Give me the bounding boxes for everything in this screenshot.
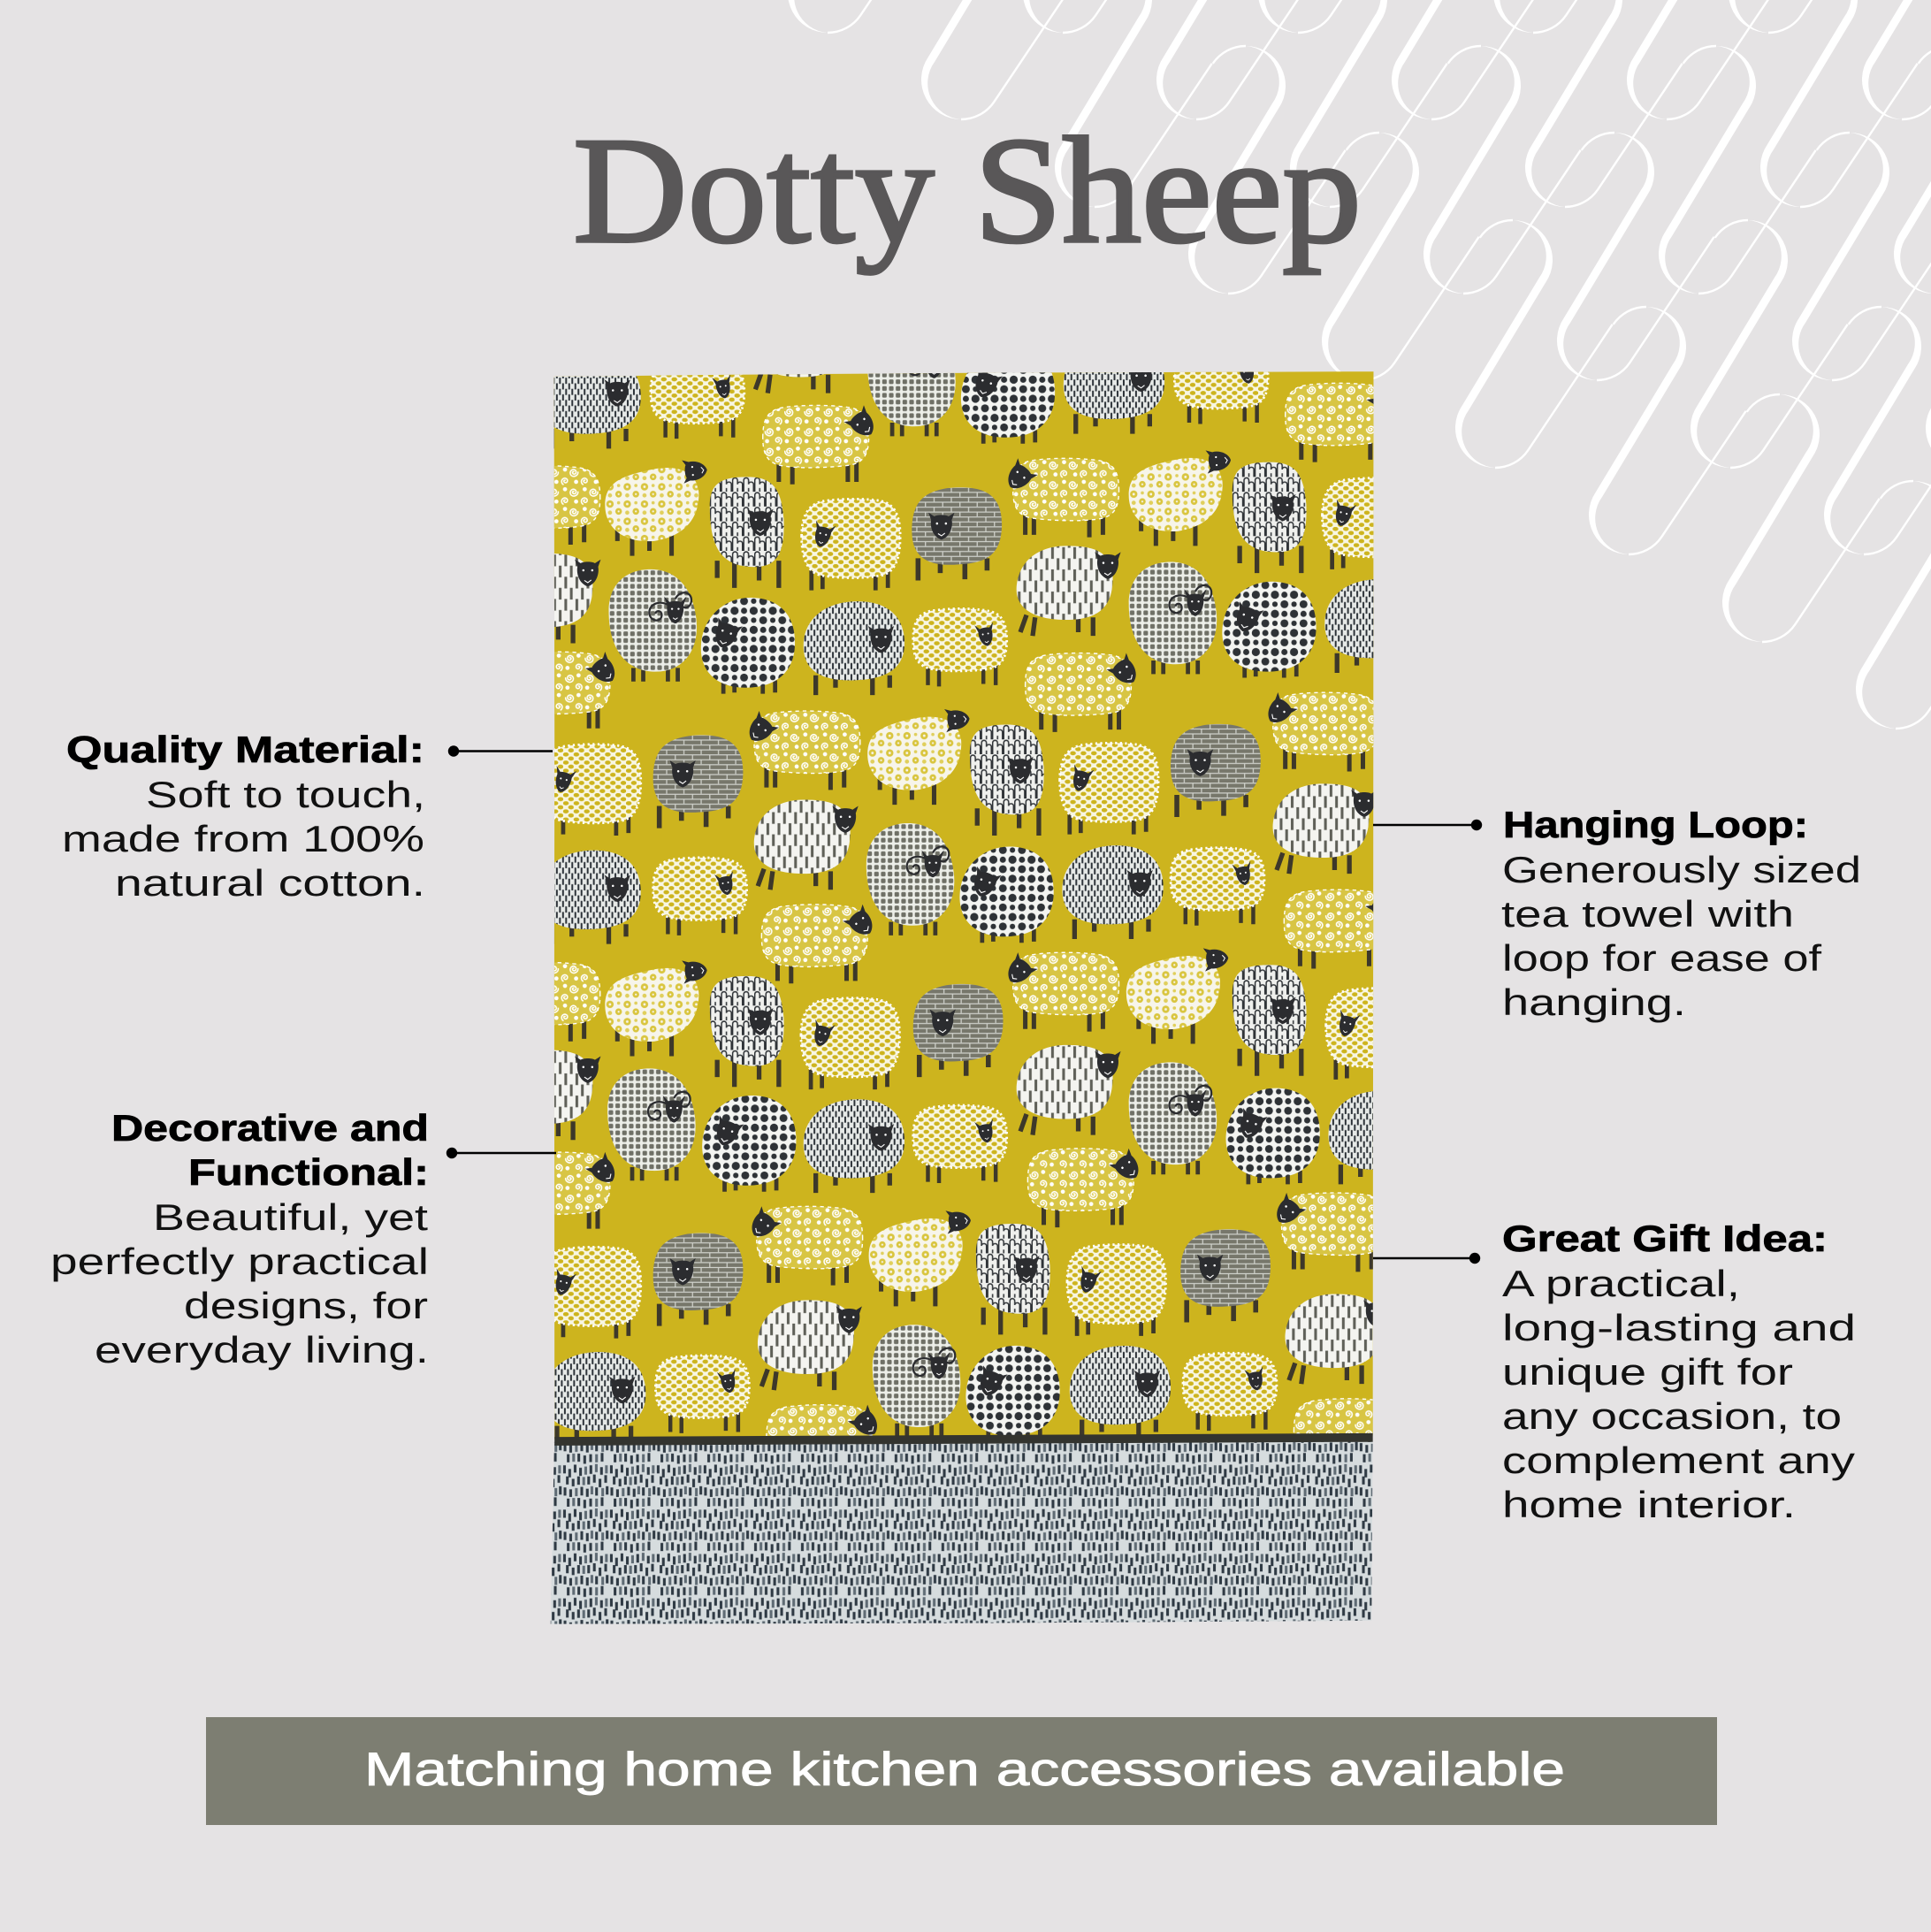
body text: Soft to touch,: [146, 774, 425, 815]
tea towel product image: [550, 371, 1374, 1624]
sheep: stripes: [1273, 783, 1378, 874]
sheep: lattice: [1067, 1245, 1165, 1336]
body text: [50, 1196, 429, 1371]
banner background: [206, 1717, 1717, 1825]
body text: [1502, 1263, 1856, 1525]
sheep: lattice: [653, 858, 747, 935]
callout: decorative and functional: [50, 1107, 556, 1371]
sheep: polka: [701, 598, 795, 694]
body text: designs, for: [184, 1285, 428, 1326]
sheep: lattice: [802, 499, 900, 591]
title: Dotty Sheep: [573, 107, 1362, 275]
sheep: dash: [1070, 1346, 1171, 1439]
sheep: ram mesh: [1129, 1062, 1217, 1174]
body text: [1501, 849, 1861, 1023]
sheep: lattice: [1326, 989, 1424, 1080]
sheep: scallop: [1233, 965, 1307, 1076]
sheep: polka: [966, 1346, 1060, 1442]
sheep: scallop: [710, 976, 784, 1087]
sheep: scallop: [976, 1224, 1050, 1334]
sheep: grey stone: [912, 487, 1002, 580]
sheep: stripes: [1285, 1294, 1389, 1384]
sheep: dash: [553, 376, 641, 449]
towel patterned lower band: [551, 1439, 1373, 1624]
sheep: mesh: [868, 373, 956, 437]
sheep: dash: [539, 851, 641, 944]
body text: natural cotton.: [115, 862, 425, 904]
sheep: ram mesh: [873, 1325, 960, 1437]
sheep: lattice: [542, 1247, 641, 1339]
body text: hanging.: [1502, 981, 1686, 1023]
sheep: swirl: [1026, 653, 1143, 732]
callout: great gift idea: [1373, 1218, 1856, 1525]
sheep: swirl: [1027, 1149, 1146, 1227]
connector line: [1373, 824, 1477, 826]
sheep: swirl: [554, 651, 615, 729]
sheep: stripes: [758, 1300, 862, 1390]
sheep: swirl, cut: [553, 465, 601, 545]
sheep pattern: [553, 371, 1374, 1438]
sheep: scallop: [1233, 462, 1307, 573]
sheep: swirl: [744, 1206, 863, 1286]
sheep: swirl: [1294, 1399, 1412, 1478]
callout: quality material: [62, 729, 553, 904]
sheep: swirl: [1285, 382, 1374, 462]
sheep: white curl: [605, 458, 708, 556]
heading: Great Gift Idea:: [1502, 1218, 1828, 1259]
heading: Quality Material:: [66, 729, 424, 770]
heading: [111, 1107, 429, 1193]
body text: loop for ease of: [1502, 937, 1821, 979]
body text: perfectly practical: [50, 1241, 429, 1282]
sheep: stripes: [1017, 546, 1121, 636]
sheep: lattice: [913, 1105, 1007, 1183]
sheep: ram mesh: [609, 569, 697, 682]
sheep: scallop: [710, 477, 784, 588]
sheep: stripes: [754, 800, 859, 890]
body text: any occasion, to: [1502, 1395, 1842, 1437]
connector line: [452, 1152, 556, 1154]
sheep: lattice: [1172, 371, 1270, 424]
sheep: grey stone: [653, 735, 743, 829]
sheep: dash: [804, 601, 904, 695]
sheep: lattice: [542, 745, 641, 836]
body text: [62, 774, 425, 904]
body text: made from 100%: [62, 818, 424, 859]
decorative white loop pattern: [788, 0, 1931, 729]
sheep: swirl: [761, 905, 880, 983]
sheep: white curl: [867, 707, 971, 805]
sheep: swirl: [763, 405, 882, 485]
sheep: dash: [1324, 579, 1374, 673]
sheep: polka: [960, 372, 1056, 444]
sheep: lattice: [913, 608, 1007, 686]
sheep: white curl: [1129, 448, 1232, 546]
sheep: polka: [702, 1096, 796, 1192]
connector line: [1373, 1257, 1475, 1259]
heading: Functional:: [188, 1151, 429, 1193]
heading: Decorative and: [111, 1107, 429, 1149]
sheep: ram mesh: [866, 823, 954, 935]
body text: Generously sized: [1502, 849, 1861, 890]
sheep: lattice: [801, 998, 899, 1089]
banner: [206, 1717, 1717, 1825]
sheep: white curl: [1126, 946, 1229, 1044]
callout: hanging loop: [1373, 804, 1861, 1023]
sheep: polka: [1226, 1088, 1320, 1184]
sheep: swirl: [1269, 1193, 1387, 1271]
sheep: polka: [1222, 582, 1317, 678]
sheep: stripes: [1017, 1045, 1121, 1135]
sheep: swirl: [504, 1152, 622, 1231]
sheep: white curl: [605, 958, 708, 1056]
body text: unique gift for: [1502, 1351, 1793, 1393]
body text: complement any: [1502, 1439, 1855, 1481]
sheep: dash: [804, 1099, 904, 1193]
sheep: dash: [1062, 845, 1164, 939]
sheep: dash: [545, 1352, 645, 1446]
sheep: lattice: [1183, 1353, 1277, 1431]
sheep: dash: [1063, 372, 1165, 434]
sheep: grey stone: [913, 984, 1004, 1077]
sheep: grey stone: [1171, 724, 1261, 817]
sheep: swirl: [1001, 458, 1119, 538]
body text: Beautiful, yet: [153, 1196, 428, 1238]
sheep: scallop: [970, 725, 1044, 836]
sheep: lattice: [655, 1355, 749, 1433]
towel dark stripe: [554, 1433, 1373, 1446]
connector dot: [1469, 1253, 1480, 1264]
connector line: [454, 750, 553, 752]
banner text: Matching home kitchen accessories available: [364, 1744, 1565, 1796]
sheep: stripes, legs only: [753, 374, 831, 393]
towel fabric base: [554, 371, 1373, 1439]
sheep: stripes: [553, 554, 601, 644]
sheep: swirl: [1268, 691, 1374, 771]
sheep: swirl, cut: [482, 962, 600, 1042]
sheep: swirl: [767, 1405, 885, 1484]
body text: A practical,: [1502, 1263, 1740, 1304]
sheep: dash: [1328, 1090, 1430, 1184]
sheep: grey stone: [653, 1233, 743, 1326]
sheep: swirl: [742, 711, 860, 790]
sheep: lattice: [1060, 743, 1158, 835]
connector dot: [1471, 820, 1482, 830]
body text: everyday living.: [95, 1329, 429, 1371]
body text: tea towel with: [1501, 893, 1794, 935]
sheep: ram mesh: [607, 1068, 696, 1180]
sheep: lattice: [1171, 848, 1264, 926]
sheep: polka: [959, 846, 1054, 943]
sheep: swirl: [1284, 890, 1402, 968]
sheep: lattice: [1321, 477, 1374, 569]
sheep: stripes: [496, 1050, 600, 1140]
sheep: grey stone: [1180, 1229, 1271, 1322]
body text: long-lasting and: [1502, 1307, 1856, 1348]
body text: home interior.: [1502, 1484, 1796, 1525]
heading: Hanging Loop:: [1503, 804, 1808, 845]
sheep: white curl: [869, 1209, 972, 1306]
sheep: lattice: [649, 375, 746, 439]
sheep: ram mesh: [1129, 562, 1217, 674]
connector dot: [446, 1148, 457, 1158]
sheep: swirl: [1001, 952, 1119, 1032]
connector dot: [448, 745, 459, 757]
